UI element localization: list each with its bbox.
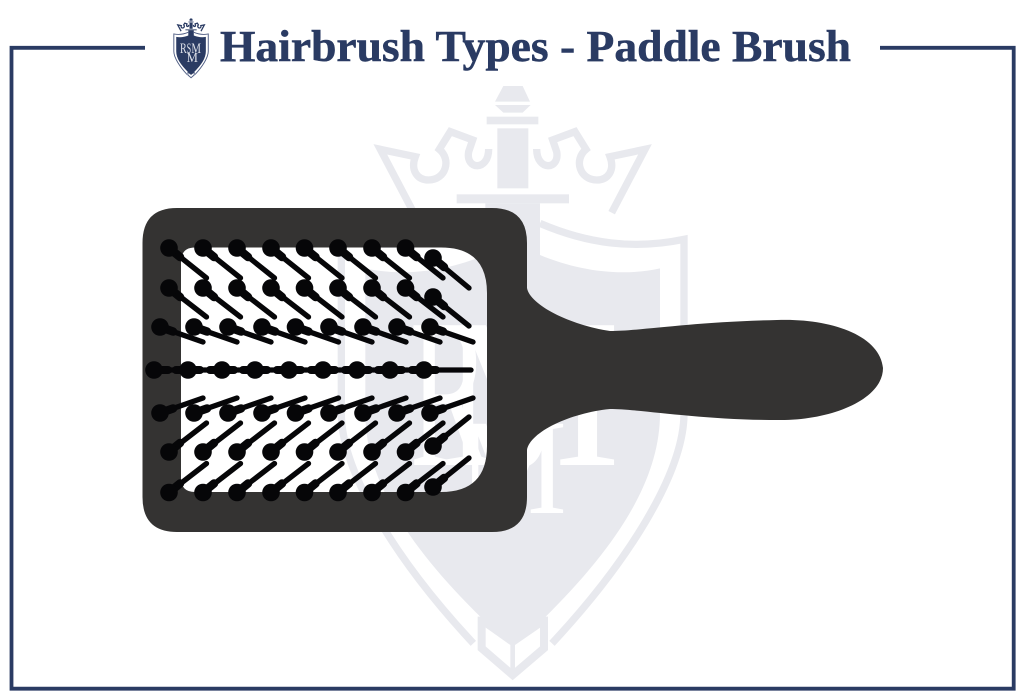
icon: header logo: M [191,41,201,57]
bristle row 4 [154,367,471,373]
bristles [154,248,473,492]
icon: header logo [174,19,208,78]
paddle brush illustration [142,208,883,532]
watermark: shield logo: M [458,393,567,543]
bristle row 6 [169,417,469,452]
icon: header logo: M [187,50,198,65]
icon: header logo: R [180,41,187,57]
watermark: shield logo [341,86,684,675]
bristle row 5 [160,398,473,413]
bristle row 3 [160,327,473,342]
bristle row 7 [169,458,469,492]
brush body and handle [142,208,883,532]
watermark: shield logo: S [492,276,552,512]
icon: header logo: S [187,41,191,57]
watermark: shield logo: M [440,276,620,512]
bristle row 2 [169,288,469,326]
title: Hairbrush Types - Paddle Brush [220,22,851,71]
watermark: shield logo: R [410,276,490,512]
bristle row 1 [169,248,469,288]
